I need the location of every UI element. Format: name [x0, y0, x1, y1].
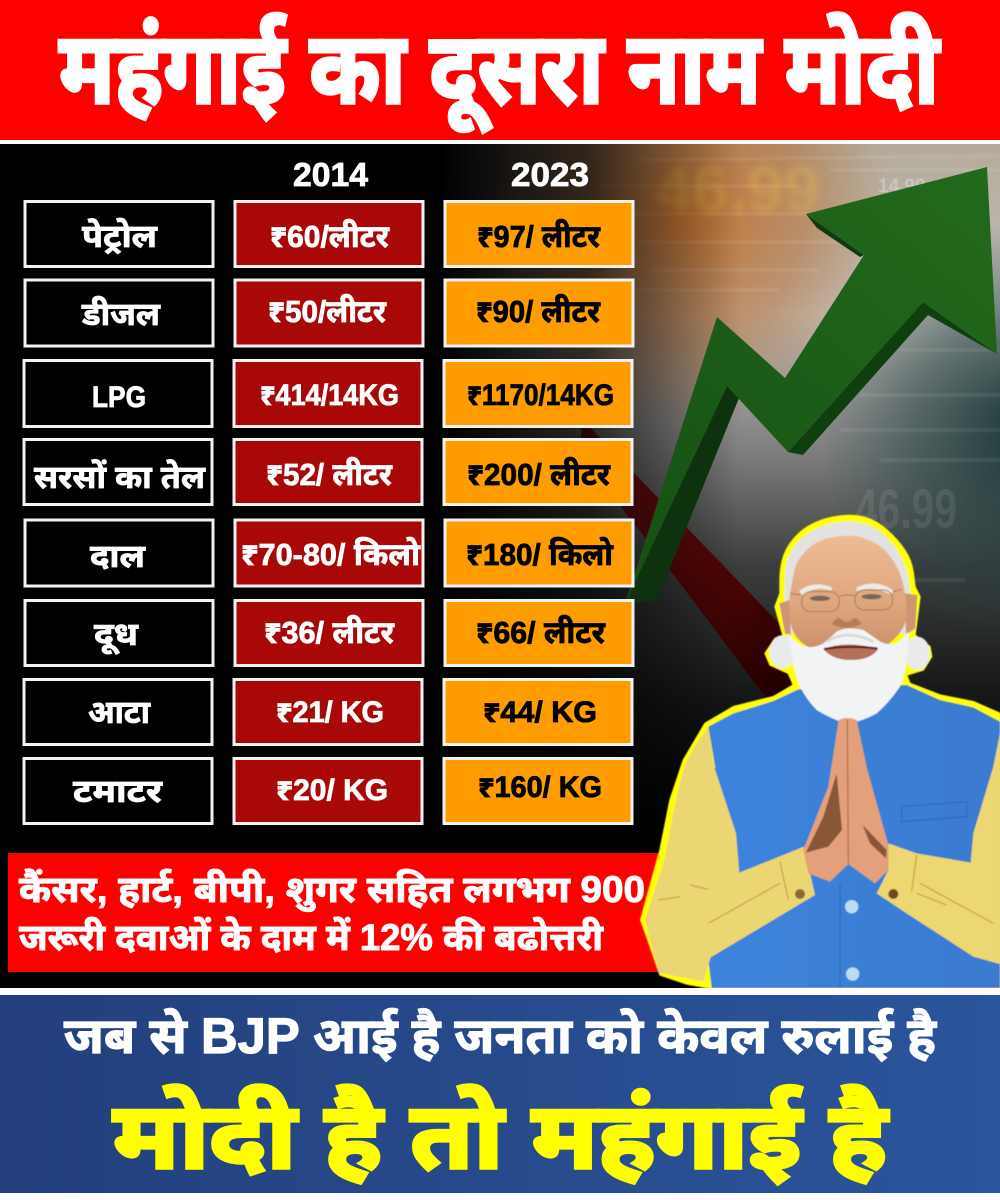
row: diesel: ₹50/लीटर — [268, 294, 387, 329]
sleeve folds — [658, 855, 993, 923]
bottom slogan panel — [0, 995, 1000, 1193]
ears — [779, 593, 917, 635]
row: mustard oil: ₹200/ लीटर — [467, 457, 611, 492]
hair — [785, 521, 910, 633]
vest placket — [838, 883, 841, 988]
cuff buttons — [795, 889, 805, 899]
row: tomato — [24, 758, 632, 824]
slogan line 2: मोदी है तो महंगाई है — [113, 1085, 889, 1188]
row: mustard oil: ₹52/ लीटर — [266, 457, 393, 492]
left sleeve — [645, 727, 815, 982]
year heading 2023: 2023 — [511, 156, 589, 193]
chart background panel: 14.99 — [878, 176, 926, 197]
callout: medicine prices: जरूरी दवाओं के दाम में 12% की बढोत्तरी — [19, 916, 604, 958]
nose shadow — [832, 618, 862, 628]
head — [789, 536, 907, 655]
glasses — [790, 589, 902, 612]
vest pocket — [902, 802, 967, 822]
row: LPG: LPG — [92, 381, 146, 414]
row: diesel — [25, 280, 633, 346]
hand hair — [806, 773, 887, 858]
row: diesel: डीजल — [81, 296, 161, 332]
row: dal: ₹70-80/ किलो — [241, 537, 421, 572]
chart background panel — [0, 144, 1000, 988]
eyebrows — [799, 584, 893, 596]
blue vest — [705, 685, 1000, 988]
row: flour: आटा — [88, 694, 151, 730]
mouth — [823, 644, 878, 660]
row: flour: ₹44/ KG — [483, 696, 597, 729]
green rising arrow — [625, 167, 997, 604]
row: mustard oil: सरसों का तेल — [34, 459, 206, 495]
red falling arrow — [581, 418, 800, 720]
white separator band — [0, 988, 1000, 995]
row: milk — [25, 600, 633, 666]
slogan line 1: जब से BJP आई है जनता को केवल रुलाई है — [64, 1008, 938, 1064]
row: tomato: टमाटर — [73, 773, 163, 809]
white beard — [788, 628, 909, 724]
right sleeve — [877, 733, 1000, 964]
row: petrol — [25, 202, 633, 266]
yellow cut-out outline — [641, 515, 1000, 988]
portrait: man with folded hands — [641, 515, 1000, 988]
row: LPG — [24, 360, 632, 426]
callout: medicine prices: कैंसर, हार्ट, बीपी, शुगर सहित लगभग 900 — [19, 868, 645, 912]
row: dal: ₹180/ किलो — [466, 537, 614, 572]
callout: medicine prices — [8, 853, 668, 972]
row: LPG: ₹414/14KG — [260, 379, 399, 412]
eyes — [810, 596, 830, 601]
row: LPG: ₹1170/14KG — [467, 379, 614, 412]
folded hands — [803, 718, 888, 883]
row: petrol: ₹60/लीटर — [270, 219, 390, 254]
row: milk: दूध — [94, 616, 139, 655]
chart background panel: 46.99 — [855, 477, 957, 540]
row: dal: दाल — [90, 538, 146, 574]
chart background panel: 46.99 — [655, 152, 820, 226]
row: mustard oil — [24, 440, 632, 504]
row: dal — [25, 520, 633, 586]
moustache shade — [827, 635, 873, 642]
row: tomato: ₹20/ KG — [276, 774, 388, 807]
row: diesel: ₹90/ लीटर — [476, 294, 601, 329]
year heading 2014: 2014 — [293, 156, 369, 193]
side beard puffs — [769, 635, 930, 670]
row: milk: ₹36/ लीटर — [264, 615, 395, 650]
finger line — [847, 720, 848, 863]
row: flour: ₹21/ KG — [276, 696, 384, 729]
row: tomato: ₹160/ KG — [478, 771, 602, 804]
row: petrol: ₹97/ लीटर — [477, 219, 601, 254]
vest buttons — [845, 900, 858, 913]
row: petrol: पेट्रोल — [82, 218, 158, 255]
row: flour — [24, 680, 632, 744]
row: milk: ₹66/ लीटर — [476, 615, 606, 650]
